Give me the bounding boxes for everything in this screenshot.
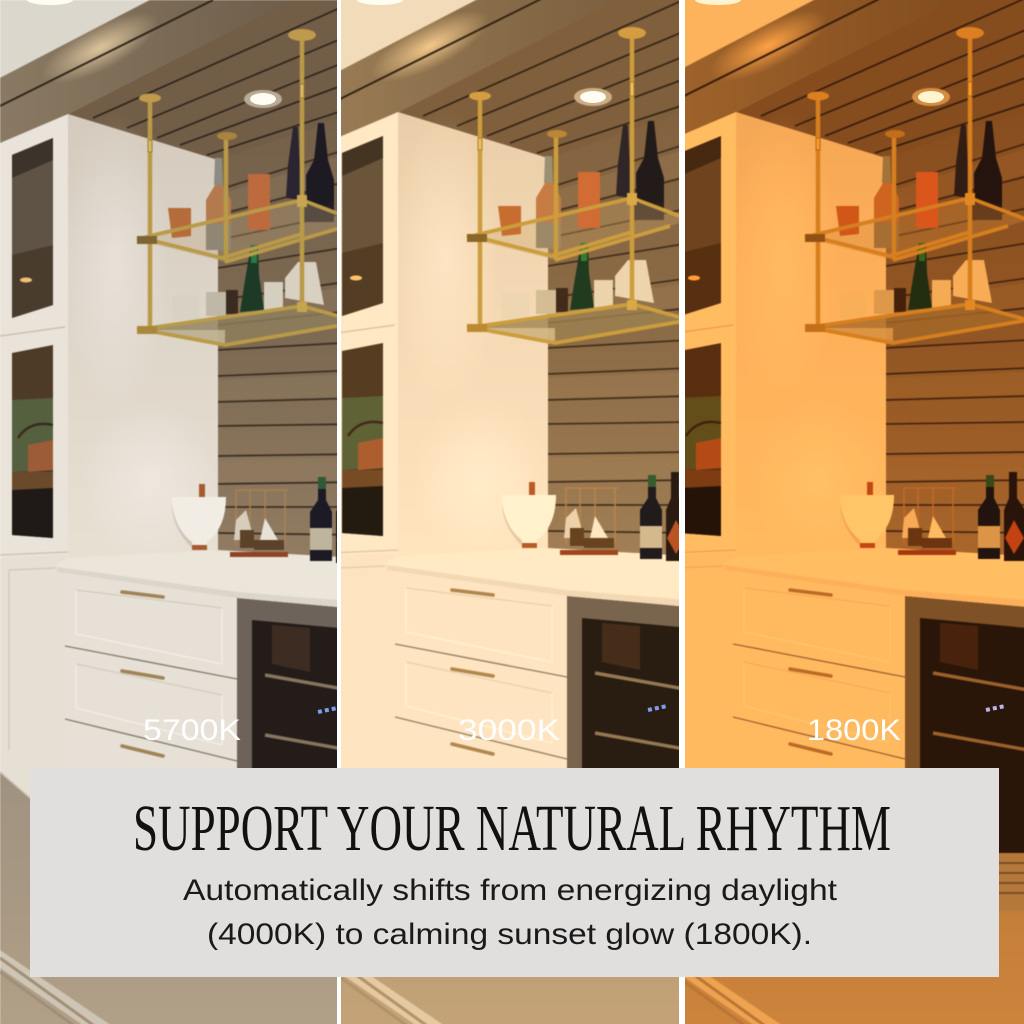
- panel: 1800K photo: [685, 0, 1024, 1024]
- floor: [0, 772, 360, 1024]
- white glass cabinet: [668, 108, 888, 796]
- label: 1800K: 1800K: [807, 714, 901, 747]
- wine fridge: [567, 595, 690, 911]
- recessed lights: [695, 0, 944, 103]
- white glass cabinet: [0, 110, 220, 798]
- brass shelves: [467, 27, 690, 343]
- description line 2: (4000K) to calming sunset glow (1800K).: [207, 918, 812, 951]
- countertop items: [840, 472, 1024, 561]
- plank back wall: [218, 112, 360, 562]
- brass shelves: [137, 29, 360, 345]
- floor: [668, 770, 1024, 1024]
- wood ceiling and beam: [330, 0, 690, 168]
- label: 3000K: 3000K: [458, 714, 560, 747]
- plank back wall: [548, 110, 690, 560]
- counter and drawers: [57, 550, 360, 800]
- fridge blue lights: [648, 706, 667, 710]
- wood ceiling and beam: [0, 0, 360, 170]
- counter and drawers: [387, 548, 690, 798]
- recessed lights: [27, 0, 276, 105]
- counter and drawers: [725, 548, 1024, 798]
- recessed lights: [357, 0, 606, 103]
- brass shelves: [805, 27, 1024, 343]
- wine fridge: [237, 597, 360, 913]
- plank back wall: [886, 110, 1024, 560]
- caption panel: [30, 768, 999, 977]
- countertop items: [502, 472, 687, 561]
- label: 5700K: 5700K: [143, 714, 241, 747]
- fridge blue lights: [318, 708, 337, 712]
- panel: 3000K photo: [341, 0, 679, 1024]
- white glass cabinet: [330, 108, 550, 796]
- fridge blue lights: [986, 706, 1005, 710]
- countertop items: [172, 474, 357, 563]
- description line 1: Automatically shifts from energizing daylight: [183, 874, 838, 907]
- panel: 5700K photo: [0, 0, 337, 1024]
- floor: [330, 770, 690, 1024]
- wood ceiling and beam: [668, 0, 1024, 168]
- wine fridge: [905, 595, 1024, 911]
